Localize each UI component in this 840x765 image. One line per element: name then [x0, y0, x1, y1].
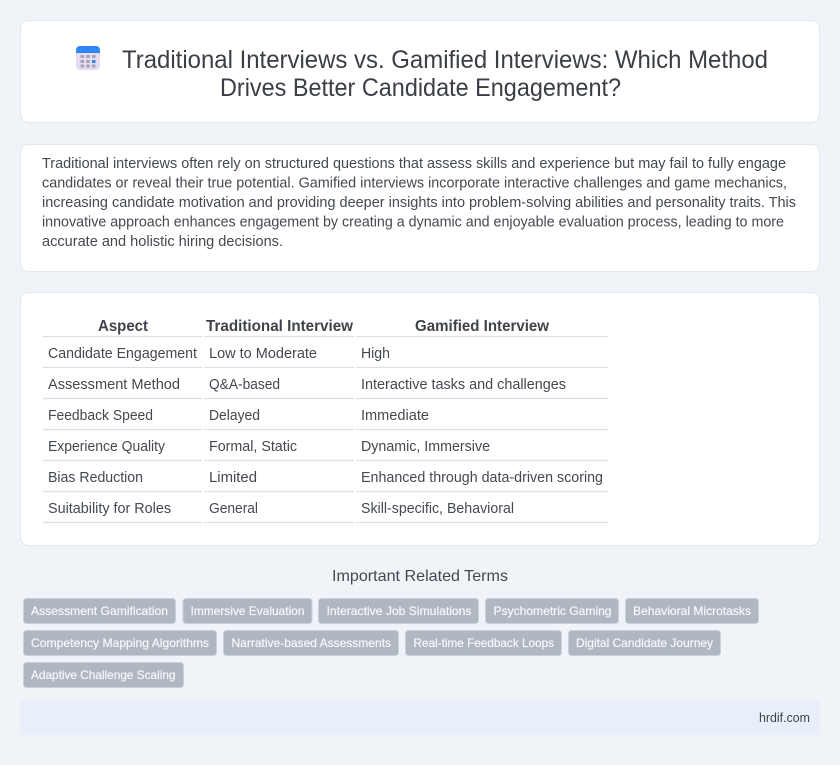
row: assessment method: Interactive tasks and challenges: [361, 377, 566, 393]
text block: summary: candidates or reveal their true potential. Gamified interviews incorporate interactive challenges and game mechanics,: [42, 176, 787, 192]
section: related terms: [24, 568, 758, 688]
row: bias reduction: Bias Reduction: [48, 470, 143, 486]
text block: summary: [42, 156, 796, 250]
row: feedback speed: [43, 408, 608, 430]
tag: competency mapping algorithms: Competency Mapping Algorithms: [31, 636, 209, 650]
row: experience quality: [43, 439, 608, 460]
title: [122, 46, 768, 102]
row: experience quality: Experience Quality: [48, 439, 166, 455]
table header: Aspect: [98, 318, 148, 335]
table header: Gamified Interview: [415, 318, 550, 335]
panel: comparison table: [20, 292, 820, 546]
tag: digital candidate journey: Digital Candidate Journey: [576, 636, 713, 650]
row: experience quality: Formal, Static: [209, 439, 297, 455]
text block: summary: increasing candidate motivation and providing deeper insights into problem-solving abilities and personality traits. This: [42, 195, 796, 211]
row: bias reduction: Limited: [209, 470, 257, 486]
footer: [20, 701, 820, 735]
row: bias reduction: Enhanced through data-driven scoring: [361, 470, 603, 486]
heading: related terms: Important Related Terms: [332, 568, 508, 585]
text block: summary: innovative approach enhances engagement by creating a dynamic and enjoyable evaluation process, leading to more: [42, 214, 784, 230]
tag: adaptive challenge scaling: [24, 662, 184, 688]
tag: competency mapping algorithms: [24, 630, 216, 656]
tag: assessment gamification: Assessment Gamification: [31, 604, 168, 618]
tag: real-time feedback loops: Real-time Feedback Loops: [414, 636, 554, 650]
row: assessment method: [43, 377, 608, 398]
table header: [43, 318, 608, 336]
row: suitability for roles: [43, 501, 608, 522]
tag: interactive job simulations: [318, 598, 478, 624]
panel: header: [20, 20, 820, 122]
row: suitability for roles: General: [209, 501, 258, 517]
tag: assessment gamification: [24, 598, 176, 624]
row: assessment method: Q&A-based: [209, 377, 280, 393]
tag: digital candidate journey: [568, 630, 720, 656]
tag: interactive job simulations: Interactive Job Simulations: [326, 604, 472, 618]
tag: immersive evaluation: [183, 598, 312, 624]
title: Drives Better Candidate Engagement?: [220, 74, 621, 102]
tag: adaptive challenge scaling: Adaptive Challenge Scaling: [31, 668, 176, 682]
row: assessment method: Assessment Method: [48, 377, 180, 393]
row: feedback speed: Delayed: [209, 408, 260, 424]
title: Traditional Interviews vs. Gamified Interviews: Which Method: [122, 46, 768, 74]
tag: behavioral microtasks: Behavioral Microtasks: [633, 604, 751, 618]
tag: psychometric gaming: Psychometric Gaming: [494, 604, 612, 618]
tag: narrative-based assessments: Narrative-based Assessments: [232, 636, 391, 650]
row: candidate engagement: High: [361, 346, 390, 362]
table header: Traditional Interview: [206, 318, 354, 335]
panel: summary paragraph: [20, 144, 820, 272]
row: candidate engagement: [43, 346, 608, 368]
tag: narrative-based assessments: [224, 630, 398, 656]
row: bias reduction: [43, 470, 608, 492]
row: experience quality: Dynamic, Immersive: [361, 439, 490, 455]
tag: behavioral microtasks: [626, 598, 758, 624]
row: feedback speed: Immediate: [361, 408, 429, 424]
icon: calendar: [76, 46, 100, 70]
footer credit: hrdif.com: [759, 710, 810, 725]
tag: psychometric gaming: [486, 598, 618, 624]
tag: immersive evaluation: Immersive Evaluation: [190, 604, 304, 618]
row: candidate engagement: Low to Moderate: [209, 346, 317, 362]
row: suitability for roles: Skill-specific, Behavioral: [361, 501, 514, 517]
row: feedback speed: Feedback Speed: [48, 408, 153, 424]
text block: summary: Traditional interviews often rely on structured questions that assess skills and experience but may fail to fully engage: [42, 156, 786, 172]
tag: real-time feedback loops: [406, 630, 562, 656]
row: suitability for roles: Suitability for Roles: [48, 501, 171, 517]
text block: summary: accurate and holistic hiring decisions.: [42, 234, 283, 250]
row: candidate engagement: Candidate Engagement: [48, 346, 197, 362]
